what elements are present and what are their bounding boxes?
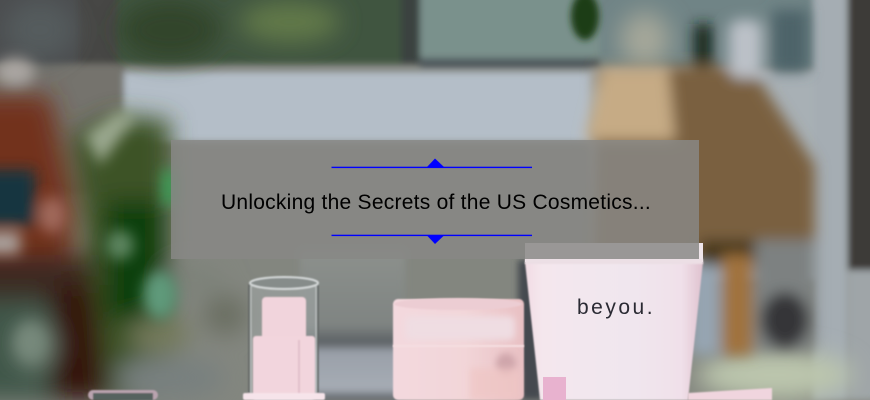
title: Unlocking the Secrets of the US Cosmetics... — [221, 191, 651, 214]
pump bottle with clear cap — [243, 277, 325, 400]
translucent title panel — [171, 140, 699, 259]
beyou tube — [525, 243, 703, 400]
small round compact at lower left — [88, 390, 158, 400]
cream jar — [393, 298, 524, 400]
brand name: beyou. — [577, 296, 655, 319]
bottom ornament line — [332, 235, 532, 244]
pink box at lower right — [688, 388, 772, 400]
top ornament line — [332, 158, 532, 168]
tube label — [543, 377, 566, 400]
